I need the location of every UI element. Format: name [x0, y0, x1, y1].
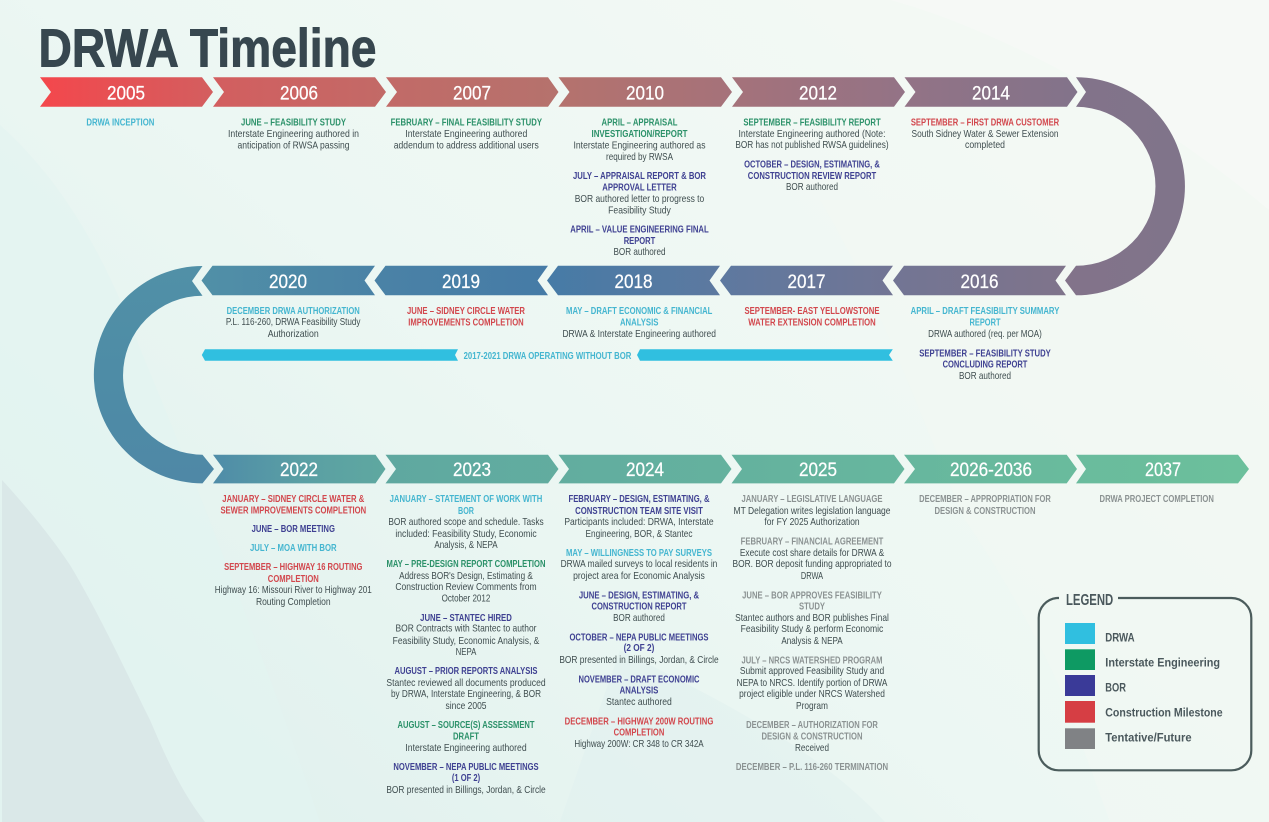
- entry: BOR approves feasibility study: JUNE – BOR APPROVES FEASIBILITY: [742, 590, 882, 601]
- entry: Highway 16 routing: Highway 16: Missouri River to Highway 201: [215, 585, 372, 596]
- arrow: 2005: [40, 77, 213, 107]
- legend item: Tentative/Future: Tentative/Future: [1105, 733, 1192, 745]
- legend item: Interstate Engineering: [1065, 649, 1220, 670]
- entry: prior reports analysis: Stantec reviewed all documents produced: [386, 678, 546, 689]
- entry: legislative language: [734, 494, 891, 528]
- column: 2005: DRWA INCEPTION: [86, 117, 154, 128]
- entry: site visit: [564, 494, 714, 540]
- arrow: 2020: [202, 266, 375, 295]
- entry: design and construction report: JUNE – DESIGN, ESTIMATING, &: [579, 590, 700, 601]
- entry: site visit: FEBRUARY – DESIGN, ESTIMATING, &: [568, 494, 710, 505]
- legend item: Interstate Engineering: Interstate Engineering: [1105, 658, 1220, 670]
- entry: authorization for design and construction: DECEMBER – AUTHORIZATION FOR: [746, 720, 878, 731]
- entry: design and construction report: CONSTRUCTION REPORT: [592, 601, 687, 612]
- entry: NRCS watershed program: JULY – NRCS WATERSHED PROGRAM: [742, 655, 882, 666]
- entry: source assessment draft: Interstate Engineering authored: [405, 743, 527, 754]
- entry: source assessment draft: [398, 720, 535, 754]
- entry: BOR approves feasibility study: STUDY: [799, 601, 825, 612]
- entry: feasibility report: [735, 117, 889, 151]
- entry: site visit: CONSTRUCTION TEAM SITE VISIT: [575, 506, 703, 517]
- column: 2007: [391, 117, 542, 151]
- column: 2014: completed: [965, 140, 1005, 151]
- entry: value engineering: [570, 224, 709, 258]
- arrow: 2025: [732, 455, 904, 483]
- entry: draft feasibility summary: DRWA authored (req. per MOA): [928, 329, 1042, 340]
- entry: willingness to pay surveys: project area for Economic Analysis: [573, 571, 705, 582]
- column: 2017: SEPTEMBER- EAST YELLOWSTONE: [744, 306, 880, 317]
- arrow: 2026-2036: [904, 455, 1077, 483]
- entry: Highway 16 routing: COMPLETION: [268, 574, 319, 585]
- entry: appraisal investigation: [574, 117, 706, 163]
- arrow: 2014: [904, 77, 1078, 107]
- entry: NEPA public meetings 2 of 2: BOR presented in Billings, Jordan, & Circle: [559, 655, 719, 666]
- entry: feasibility report: BOR has not published RWSA guidelines): [735, 140, 889, 151]
- legend item: Construction Milestone: Construction Milestone: [1105, 708, 1223, 720]
- entry: feasibility study concluding report: BOR authored: [959, 371, 1011, 382]
- arrow: 2024: [558, 455, 732, 483]
- column: 2018: ANALYSIS: [620, 317, 659, 328]
- legend item: BOR: [1065, 675, 1127, 696]
- entry: Sidney Circle completion: [220, 494, 366, 517]
- legend item: DRWA: [1065, 623, 1135, 645]
- entry: pre-design report: MAY – PRE-DESIGN REPORT COMPLETION: [386, 559, 546, 570]
- arrow: 2022: [213, 455, 386, 483]
- entry: BOR approves feasibility study: Analysis & NEPA: [781, 636, 843, 647]
- entry: draft feasibility summary: APRIL – DRAFT FEASIBILITY SUMMARY: [911, 306, 1059, 317]
- entry: design and construction report: BOR authored: [613, 613, 665, 624]
- entry: Highway 200W routing: COMPLETION: [614, 727, 664, 738]
- arrow: 2017: 2017: [788, 272, 826, 293]
- arrow: 2023: [386, 455, 558, 483]
- entry: design review report: OCTOBER – DESIGN, ESTIMATING, &: [744, 159, 880, 170]
- timeline row: 2016 to 2020: [202, 266, 1066, 295]
- entry: draft economic analysis: Stantec authored: [606, 697, 672, 708]
- entry: BOR approves feasibility study: Feasibility Study & perform Economic: [741, 624, 883, 635]
- entry: financial agreement: Execute cost share details for DRWA &: [740, 548, 884, 559]
- entry: Stantec hired: [393, 613, 539, 658]
- arrow: 2006: 2006: [280, 84, 318, 104]
- column: 2006: JUNE – FEASIBILITY STUDY: [241, 117, 346, 128]
- column: 2014: SEPTEMBER – FIRST DRWA CUSTOMER: [911, 117, 1060, 128]
- arrow: 2017: [720, 266, 893, 295]
- entry: NRCS watershed program: [737, 655, 887, 712]
- entry: design review report: BOR authored: [786, 182, 838, 193]
- entry: BOR approves feasibility study: [735, 590, 889, 647]
- column: 2019: [407, 306, 525, 328]
- arrow: 2020: 2020: [269, 272, 307, 293]
- arrow: 2006: [213, 77, 386, 107]
- legend item: DRWA: DRWA: [1105, 633, 1135, 645]
- entry: statement of work: Analysis, & NEPA: [434, 540, 498, 551]
- arrow: 2016: 2016: [960, 272, 998, 293]
- entry: Highway 200W routing: Highway 200W: CR 348 to CR 342A: [574, 739, 704, 750]
- entry: NEPA public meetings 1 of 2: (1 OF 2): [452, 773, 480, 784]
- entry: draft feasibility summary: REPORT: [970, 317, 1001, 328]
- column: 2007: FEBRUARY – FINAL FEASIBILITY STUDY: [391, 117, 542, 128]
- column: 2020: DECEMBER DRWA AUTHORIZATION: [227, 306, 360, 317]
- entry: statement of work: included: Feasibility Study, Economic: [395, 529, 537, 540]
- column: 2006: Interstate Engineering authored in: [228, 129, 359, 140]
- entry: pre-design report: Construction Review Comments from: [395, 582, 537, 593]
- column: 2024: [559, 494, 719, 750]
- arrow: 2012: [732, 77, 905, 107]
- entry: draft economic analysis: ANALYSIS: [620, 685, 658, 696]
- entry: Highway 16 routing: [215, 562, 372, 608]
- arrow: 2014: 2014: [972, 84, 1010, 104]
- entry: appraisal investigation: required by RWSA: [606, 152, 673, 163]
- column: 2019: IMPROVEMENTS COMPLETION: [408, 317, 524, 328]
- legend heading: LEGEND: [1066, 592, 1113, 609]
- column: 2025: [732, 494, 892, 773]
- entry: MOA with BOR: JULY – MOA WITH BOR: [250, 543, 337, 554]
- entry: authorization for design and construction: DESIGN & CONSTRUCTION: [762, 731, 862, 742]
- column: 2023: [386, 494, 546, 796]
- entry: willingness to pay surveys: MAY – WILLINGNESS TO PAY SURVEYS: [566, 548, 712, 559]
- entry: financial agreement: DRWA: [801, 571, 823, 582]
- column: 2012: [735, 117, 889, 193]
- entry: willingness to pay surveys: [561, 548, 718, 582]
- entry: Highway 200W routing: DECEMBER – HIGHWAY 200W ROUTING: [565, 716, 713, 727]
- entry: Sidney Circle completion: JANUARY – SIDNEY CIRCLE WATER &: [222, 494, 365, 505]
- entry: feasibility study concluding report: CONCLUDING REPORT: [943, 359, 1028, 370]
- arrow: 2012: 2012: [799, 84, 837, 104]
- arrow: 2026-2036: 2026-2036: [950, 460, 1032, 481]
- entry: BOR meeting: JUNE – BOR MEETING: [252, 524, 335, 535]
- column: 2026-2036: [919, 494, 1051, 517]
- timeline row: 2005 to 2014: [40, 77, 1078, 107]
- entry: NRCS watershed program: Program: [796, 701, 828, 712]
- entry: prior reports analysis: [386, 666, 546, 712]
- column: 2014: [911, 117, 1060, 151]
- entry: NRCS watershed program: Submit approved Feasibility Study and: [740, 666, 884, 677]
- column: 2018: [562, 306, 716, 340]
- entry: source assessment draft: DRAFT: [453, 731, 480, 742]
- arrow: 2007: [386, 77, 558, 107]
- arrow: 2018: [547, 266, 720, 295]
- entry: appraisal report: APPROVAL LETTER: [602, 182, 677, 193]
- entry: appraisal report: BOR authored letter to progress to: [575, 194, 704, 205]
- entry: financial agreement: [732, 536, 892, 582]
- entry: pre-design report: [386, 559, 546, 605]
- arrow: 2016: [893, 266, 1066, 295]
- arrow: 2019: 2019: [442, 272, 480, 293]
- column: 2016: [911, 306, 1059, 382]
- entry: NRCS watershed program: project eligible under NRCS Watershed: [739, 689, 885, 700]
- title: DRWA Timeline: [38, 18, 376, 78]
- column: 2007: addendum to address additional users: [394, 140, 539, 151]
- entry: statement of work: JANUARY – STATEMENT OF WORK WITH: [390, 494, 542, 505]
- entry: pre-design report: Address BOR's Design, Estimating &: [399, 571, 533, 582]
- column: 2019: JUNE – SIDNEY CIRCLE WATER: [407, 306, 525, 317]
- entry: NRCS watershed program: NEPA to NRCS. Identify portion of DRWA: [737, 678, 887, 689]
- entry: authorization for design and construction: Received: [795, 743, 829, 754]
- entry: feasibility study concluding report: [919, 348, 1051, 382]
- entry: Stantec hired: BOR Contracts with Stantec to author: [396, 624, 537, 635]
- left curved connector arrow: [94, 266, 214, 483]
- column: 2020: [226, 306, 361, 340]
- arrow: 2007: 2007: [453, 84, 491, 104]
- entry: P.L. 116-260 termination: DECEMBER – P.L. 116-260 TERMINATION: [736, 762, 888, 773]
- entry: appraisal report: [573, 171, 706, 216]
- legend item: Construction Milestone: [1065, 701, 1223, 723]
- entry: value engineering: APRIL – VALUE ENGINEERING FINAL: [570, 224, 709, 235]
- entry: pre-design report: October 2012: [442, 594, 491, 605]
- span arrow: 2017-2021 operating without BOR: 2017-2021 DRWA OPERATING WITHOUT BOR: [464, 351, 632, 362]
- entry: statement of work: BOR authored scope and schedule. Tasks: [388, 517, 544, 528]
- entry: Highway 16 routing: SEPTEMBER – HIGHWAY 16 ROUTING: [224, 562, 362, 573]
- entry: statement of work: BOR: [458, 506, 474, 517]
- column: 2018: MAY – DRAFT ECONOMIC & FINANCIAL: [566, 306, 712, 317]
- entry: design review report: [744, 159, 880, 193]
- arrow: 2022: 2022: [280, 460, 318, 481]
- arrow: 2005: 2005: [107, 84, 145, 104]
- entry: Stantec hired: NEPA: [456, 647, 476, 658]
- entry: NEPA public meetings 2 of 2: OCTOBER – NEPA PUBLIC MEETINGS: [570, 632, 709, 643]
- entry: NEPA public meetings 1 of 2: [386, 762, 546, 796]
- timeline row: 2022 to 2037: [213, 455, 1249, 483]
- column: 2014: South Sidney Water & Sewer Extension: [912, 129, 1059, 140]
- entry: value engineering: BOR authored: [614, 247, 666, 258]
- entry: feasibility report: Interstate Engineering authored (Note:: [738, 129, 886, 140]
- entry: financial agreement: BOR. BOR deposit funding appropriated to: [732, 559, 892, 570]
- entry: authorization for design and construction: [746, 720, 878, 754]
- entry: site visit: Participants included: DRWA, Interstate: [564, 517, 714, 528]
- column: 2007: Interstate Engineering authored: [405, 129, 528, 140]
- arrow: 2023: 2023: [453, 460, 491, 481]
- column: 2018: DRWA & Interstate Engineering authored: [562, 329, 716, 340]
- column: 2017: WATER EXTENSION COMPLETION: [748, 317, 876, 328]
- entry: NEPA public meetings 2 of 2: (2 OF 2): [624, 643, 654, 654]
- arrow: 2037: [1076, 455, 1249, 483]
- column: 2020: Authorization: [268, 329, 319, 340]
- entry: willingness to pay surveys: DRWA mailed surveys to local residents in: [561, 559, 718, 570]
- entry: feasibility study concluding report: SEPTEMBER – FEASIBILITY STUDY: [919, 348, 1051, 359]
- entry: prior reports analysis: AUGUST – PRIOR REPORTS ANALYSIS: [394, 666, 538, 677]
- entry: draft feasibility summary: [911, 306, 1059, 340]
- column: 2020: P.L. 116-260, DRWA Feasibility Study: [226, 317, 361, 328]
- span arrow: 2017-2021 operating without BOR: [202, 349, 893, 362]
- arrow: 2018: 2018: [614, 272, 652, 293]
- entry: Highway 16 routing: Routing Completion: [256, 597, 331, 608]
- arrow: 2037: 2037: [1145, 460, 1181, 481]
- entry: source assessment draft: AUGUST – SOURCE(S) ASSESSMENT: [398, 720, 535, 731]
- entry: appraisal investigation: INVESTIGATION/REPORT: [592, 129, 688, 140]
- entry: statement of work: [388, 494, 544, 551]
- entry: prior reports analysis: since 2005: [446, 701, 487, 712]
- entry: design review report: CONSTRUCTION REVIEW REPORT: [748, 171, 877, 182]
- legend item: Tentative/Future: [1065, 728, 1192, 749]
- entry: appraisal investigation: APRIL – APPRAISAL: [602, 117, 678, 128]
- entry: draft economic analysis: [578, 674, 700, 708]
- entry: site visit: Engineering, BOR, & Stantec: [586, 529, 692, 540]
- column: 2022: [215, 494, 372, 608]
- entry: Highway 200W routing: [565, 716, 713, 750]
- column: 2026-2036: DESIGN & CONSTRUCTION: [934, 506, 1036, 517]
- arrow: 2024: 2024: [626, 460, 664, 481]
- arrow: 2019: [374, 266, 548, 295]
- column: 2010: [570, 117, 709, 258]
- arrow: 2010: [558, 77, 732, 107]
- column: 2017: [744, 306, 880, 328]
- arrow: 2025: 2025: [799, 460, 837, 481]
- entry: Stantec hired: Feasibility Study, Economic Analysis, &: [393, 636, 539, 647]
- entry: Stantec hired: JUNE – STANTEC HIRED: [420, 613, 512, 624]
- column: 2026-2036: DECEMBER – APPROPRIATION FOR: [919, 494, 1051, 505]
- entry: Sidney Circle completion: SEWER IMPROVEMENTS COMPLETION: [220, 506, 366, 517]
- entry: value engineering: REPORT: [624, 236, 656, 247]
- entry: appraisal report: JULY – APPRAISAL REPORT & BOR: [573, 171, 706, 182]
- legend item: BOR: BOR: [1105, 683, 1127, 695]
- column: 2006: anticipation of RWSA passing: [238, 140, 350, 151]
- column: 2037: DRWA PROJECT COMPLETION: [1100, 494, 1214, 505]
- legend: [1039, 592, 1251, 770]
- entry: NEPA public meetings 1 of 2: NOVEMBER – NEPA PUBLIC MEETINGS: [393, 762, 539, 773]
- entry: legislative language: for FY 2025 Authorization: [764, 517, 860, 528]
- entry: legislative language: MT Delegation writes legislation language: [734, 506, 891, 517]
- entry: feasibility report: SEPTEMBER – FEASIBILITY REPORT: [743, 117, 881, 128]
- entry: appraisal investigation: Interstate Engineering authored as: [574, 140, 706, 151]
- entry: NEPA public meetings 2 of 2: [559, 632, 719, 666]
- entry: prior reports analysis: by DRWA, Interstate Engineering, & BOR: [391, 689, 541, 700]
- entry: legislative language: JANUARY – LEGISLATIVE LANGUAGE: [742, 494, 883, 505]
- entry: NEPA public meetings 1 of 2: BOR presented in Billings, Jordan, & Circle: [386, 785, 546, 796]
- entry: financial agreement: FEBRUARY – FINANCIAL AGREEMENT: [741, 536, 884, 547]
- entry: design and construction report: [579, 590, 700, 624]
- right curved connector arrow: [1065, 77, 1185, 295]
- arrow: 2010: 2010: [626, 84, 664, 104]
- column: 2006: [228, 117, 359, 151]
- entry: appraisal report: Feasibility Study: [608, 205, 672, 216]
- entry: BOR approves feasibility study: Stantec authors and BOR publishes Final: [735, 613, 889, 624]
- entry: draft economic analysis: NOVEMBER – DRAFT ECONOMIC: [578, 674, 700, 685]
